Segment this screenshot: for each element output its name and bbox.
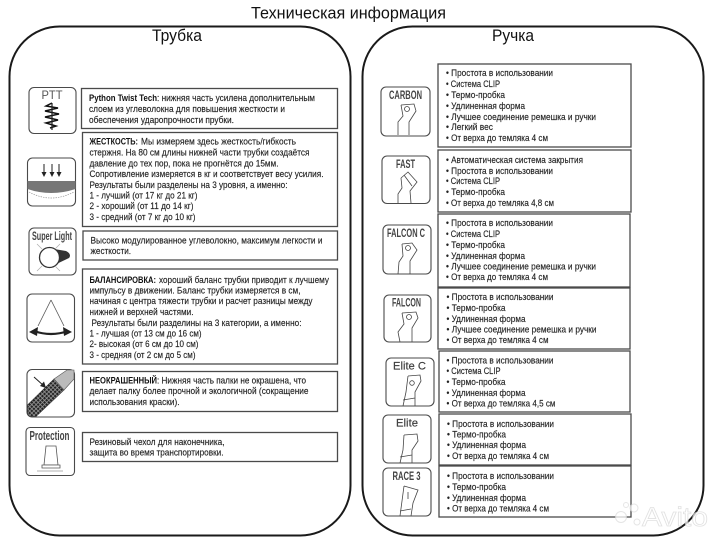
icon: Protection: Protection (30, 428, 70, 443)
text box: FALCON C: • Система CLIP (446, 229, 500, 239)
text box: RACE 3: • Простота в использовании (447, 471, 554, 481)
icon: FALCON C: FALCON C (387, 226, 425, 240)
icon: FAST (382, 156, 430, 204)
icon: Elite (383, 415, 431, 463)
text box: CARBON: • Система CLIP (446, 79, 500, 89)
text box: stiffness (82, 132, 338, 226)
text box: Python Twist Tech: : нижняя часть усилена дополнительным (157, 93, 315, 103)
text box: RACE 3: • От верха до темляка 4 см (447, 504, 549, 514)
text box: FALCON: • Простота в использовании (446, 292, 554, 302)
text box: Python Twist Tech: обеспечения ударопрочности прубки. (89, 115, 234, 125)
text box: stiffness: давление до тех пор, пока не прогнётся до 15мм. (90, 158, 278, 168)
text box: CARBON: • Простота в использовании (446, 68, 553, 78)
text box: FALCON C: • Удлиненная форма (446, 251, 526, 261)
icon: CARBON (381, 87, 430, 136)
text box: FAST: • От верха до темляка 4,8 см (446, 198, 554, 208)
heading: handle: Ручка (492, 26, 534, 45)
text box: FALCON C: • Лучшее соединение ремешка и ручки (446, 262, 596, 272)
text box: stiffness: Сопротивление измеряется в кг и соответствует весу усилия. (90, 169, 324, 179)
text box: CARBON: • Лучшее соединение ремешка и ручки (446, 112, 596, 122)
text box: FAST: • Система CLIP (446, 176, 500, 186)
watermark: Avito (616, 502, 708, 532)
text box: RACE 3: • Удлиненная форма (447, 493, 527, 503)
text box: rubber cover (82, 432, 338, 462)
text box: stiffness: 2 - хороший (от 11 до 14 кг) (90, 201, 194, 211)
icon: stiffness arrows (28, 158, 76, 206)
icon: RACE 3: RACE 3 (392, 469, 421, 483)
text box: CARBON: • Удлиненная форма (446, 101, 526, 111)
heading: tube: Трубка (152, 26, 202, 45)
icon: PTT: PTT (42, 88, 63, 102)
text box: CARBON: • От верха до темляка 4 см (446, 133, 548, 143)
text box: CARBON: • Легкий вес (446, 122, 493, 132)
text box: Elite: • От верха до темляка 4 см (447, 451, 549, 461)
text box: Elite C: • Система CLIP (446, 366, 500, 376)
text box: FALCON (438, 288, 630, 349)
text box: Elite: • Простота в использовании (447, 419, 554, 429)
text box: carbon fiber: Высоко модулированное углеволокно, максимум легкости и (90, 236, 322, 246)
text box: Elite C: • Удлиненная форма (446, 388, 526, 398)
text box: unpainted: делает палку более прочной и экологичной (сокращение (90, 386, 308, 396)
text box: FAST: • Термо-пробка (446, 187, 506, 197)
text box: Elite C: • От верха до темляка 4,5 см (446, 398, 556, 408)
text box: balance: 1 - лучшая (от 13 см до 16 см) (90, 328, 202, 338)
text box: FALCON: • Лучшее соединение ремешка и ручки (446, 324, 596, 334)
text box: stiffness: 1 - лучший (от 17 кг до 21 кг) (90, 190, 198, 200)
text box: balance (82, 269, 338, 364)
text box: stiffness: 3 - средний (от 7 кг до 10 кг) (90, 212, 196, 222)
text box: balance: хороший баланс трубки приводит к лучшему (159, 275, 329, 285)
title: Техническая информация (251, 4, 446, 22)
text box: Elite C: • Термо-пробка (446, 377, 506, 387)
icon: Elite: Elite (396, 418, 418, 430)
text box: unpainted: : Нижняя часть палки не окрашена, что (157, 376, 306, 386)
text box: Elite (439, 414, 631, 465)
text box: FALCON C: • Термо-пробка (446, 240, 506, 250)
text box: unpainted: НЕОКРАШЕННЫЙ (90, 374, 157, 386)
text box: unpainted (82, 372, 338, 412)
text box: CARBON (438, 64, 631, 147)
text box: balance: БАЛАНСИРОВКА: (90, 275, 156, 285)
icon: FALCON C (383, 225, 431, 274)
text box: FALCON: • Термо-пробка (446, 303, 506, 313)
icon: unpainted shaft (27, 370, 74, 417)
text box: stiffness: стержня. На 80 см длины нижней части трубки создаётся (90, 148, 310, 158)
icon: PTT (29, 88, 76, 134)
icon: Protection (26, 428, 74, 476)
panel: handle (362, 26, 704, 536)
text box: FAST: • Автоматическая система закрытия (446, 155, 583, 165)
text box: FALCON C: • От верха до темляка 4 см (446, 272, 548, 282)
text box: rubber cover: Резиновый чехол для наконечника, (90, 437, 224, 447)
text box: balance: импульсу в движении. Баланс трубки измеряется в см, (90, 286, 300, 296)
text box: RACE 3: • Термо-пробка (447, 482, 507, 492)
text box: carbon fiber: жесткости. (90, 246, 131, 256)
icon: FALCON: FALCON (392, 296, 421, 310)
text box: stiffness: ЖЕСТКОСТЬ: (89, 136, 138, 146)
text box: stiffness: Результаты были разделены на 3 уровня, а именно: (90, 180, 288, 190)
icon: Super Light: Super Light (32, 229, 72, 243)
icon: FALCON (384, 295, 431, 342)
panel: tube (10, 26, 350, 536)
text box: balance: нижней и верхней частями. (90, 307, 194, 317)
text box: Python Twist Tech: слоем из углеволокна для повышения жесткости и (89, 104, 285, 114)
text box: FALCON: • От верха до темляка 4 см (446, 335, 548, 345)
text box: balance: 3 - средняя (от 2 см до 5 см) (90, 350, 196, 360)
text box: rubber cover: защита во время транспортировки. (90, 448, 224, 458)
icon: FAST: FAST (396, 157, 415, 171)
text box: Elite C (439, 351, 630, 412)
text box: Python Twist Tech (82, 88, 338, 128)
icon: Elite C: Elite C (393, 360, 426, 372)
text box: stiffness: Мы измеряем здесь жесткость/гибкость (141, 136, 296, 146)
icon: balance (27, 294, 74, 342)
watermark: Avito: Avito (642, 502, 708, 532)
text box: Elite C: • Простота в использовании (446, 356, 554, 366)
text box: RACE 3 (439, 466, 631, 517)
text box: FAST: • Простота в использовании (446, 166, 553, 176)
text box: Elite: • Удлиненная форма (447, 440, 527, 450)
text box: FALCON C (438, 214, 630, 287)
text box: balance: Результаты были разделины на 3 категории, а именно: (92, 318, 302, 328)
text box: balance: 2- высокая (от 6 см до 10 см) (90, 339, 198, 349)
text box: carbon fiber (83, 231, 338, 260)
text box: FAST (438, 150, 631, 212)
text box: Elite: • Термо-пробка (447, 430, 507, 440)
text box: FALCON C: • Простота в использовании (446, 218, 553, 228)
text box: unpainted: использования краски). (90, 397, 180, 407)
icon: CARBON: CARBON (389, 88, 422, 102)
icon: Super Light (29, 228, 76, 275)
text box: Python Twist Tech: Python Twist Tech (89, 93, 157, 103)
icon: RACE 3 (383, 468, 431, 516)
text box: CARBON: • Термо-пробка (446, 90, 506, 100)
icon: Elite C (386, 358, 434, 406)
text box: FALCON: • Удлиненная форма (446, 314, 526, 324)
text box: balance: начиная с центра тяжести трубки и расчет разницы между (90, 296, 313, 306)
